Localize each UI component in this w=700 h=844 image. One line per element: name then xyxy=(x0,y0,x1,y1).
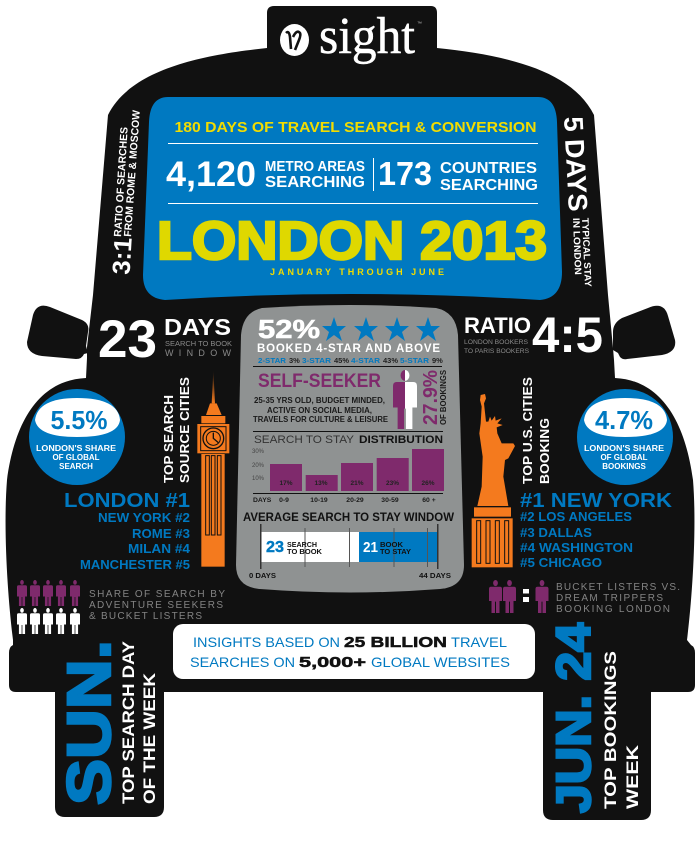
right wheel stat: june 24: JUN. 24 xyxy=(548,623,601,813)
callout: insights xyxy=(173,624,535,679)
badge: global search share: OF GLOBAL xyxy=(52,453,100,462)
timeline: average search to stay window: TO BOOK xyxy=(287,547,323,556)
timeline: average search to stay window: BOOK xyxy=(380,540,404,549)
icon: statue of liberty xyxy=(472,394,515,567)
right pillar stat: 5 DAYS xyxy=(558,116,593,212)
icon group: bucket listers vs dream trippers xyxy=(489,580,548,613)
left wheel stat: sunday: OF THE WEEK xyxy=(140,672,159,804)
heading: top search source cities: TOP SEARCH xyxy=(162,395,176,483)
23 days stat: SEARCH TO BOOK xyxy=(165,339,232,348)
right wheel stat: june 24 xyxy=(548,623,642,813)
badge: global bookings share: 4.7% xyxy=(595,405,653,435)
left mirror xyxy=(27,306,88,359)
list: top us booking cities: #4 WASHINGTON xyxy=(520,541,633,555)
logo: ™ xyxy=(417,21,422,27)
callout: insights: TRAVEL xyxy=(451,634,507,650)
bar chart: search to stay distribution: 20% xyxy=(252,463,265,469)
list: top us booking cities: #3 DALLAS xyxy=(520,526,592,540)
heading: top search source cities xyxy=(162,377,192,483)
bar chart: search to stay distribution: 21% xyxy=(350,480,364,487)
right wheel stat: june 24: TOP BOOKINGS xyxy=(601,651,620,809)
badge: global search share: SEARCH xyxy=(59,462,93,471)
self-seeker profile: TRAVELS FOR CULTURE & LEISURE xyxy=(253,415,388,424)
badge: global search share xyxy=(29,389,125,485)
timeline: average search to stay window: 23 xyxy=(266,539,284,556)
23 days stat xyxy=(98,310,232,369)
badge: global search share: 5.5% xyxy=(50,405,108,435)
heading: top us cities booking: TOP U.S. CITIES xyxy=(521,377,535,484)
caption: bucket listers vs dream trippers: DREAM TRIPPERS xyxy=(556,593,663,604)
callout: insights: 25 BILLION xyxy=(344,634,447,651)
left pillar stat xyxy=(108,110,143,275)
caption: bucket listers vs dream trippers xyxy=(556,582,680,615)
list: top search cities: MANCHESTER #5 xyxy=(80,558,190,572)
callout: insights: 5,000+ xyxy=(299,654,366,671)
badge: global bookings share: LONDON'S SHARE xyxy=(584,444,665,453)
star rating stat xyxy=(257,314,443,365)
left wheel stat: sunday: SUN. xyxy=(55,640,123,805)
self-seeker profile xyxy=(253,369,448,429)
caption: share of search: & BUCKET LISTERS xyxy=(89,611,202,622)
metro areas stat: 4,120 xyxy=(166,155,256,194)
caption: share of search: SHARE OF SEARCH BY xyxy=(89,589,225,600)
23 days stat: 23 xyxy=(98,310,157,369)
left wheel stat: sunday: TOP SEARCH DAY xyxy=(119,640,138,804)
star rating stat: 9% xyxy=(432,356,443,365)
star rating stat: 5-STAR xyxy=(400,356,430,365)
caption: share of search: ADVENTURE SEEKERS xyxy=(89,600,223,611)
left pillar stat: 3:1 xyxy=(108,237,138,275)
bar chart: search to stay distribution: 30% xyxy=(252,449,265,455)
ratio stat xyxy=(464,307,603,363)
countries stat: SEARCHING xyxy=(440,177,538,194)
right mirror xyxy=(613,306,675,359)
self-seeker profile: 25-35 YRS OLD, BUDGET MINDED, xyxy=(254,396,385,405)
bar chart: search to stay distribution: 20-29 xyxy=(346,497,364,504)
list: top search cities: LONDON #1 xyxy=(64,490,190,512)
central grey panel xyxy=(236,305,464,592)
timeline: average search to stay window: SEARCH xyxy=(287,540,317,549)
bar chart: search to stay distribution: 30-59 xyxy=(381,497,399,504)
logo: sight xyxy=(319,8,416,65)
timeline: average search to stay window: 21 xyxy=(363,539,378,556)
bar chart: search to stay distribution: 26% xyxy=(421,480,435,487)
star rating stat: BOOKED 4-STAR AND ABOVE xyxy=(257,343,440,355)
ratio stat: TO PARIS BOOKERS xyxy=(464,348,529,355)
23 days stat: DAYS xyxy=(164,314,231,340)
callout: insights: INSIGHTS BASED ON xyxy=(193,634,340,650)
bar chart: search to stay distribution: 0-9 xyxy=(279,497,289,504)
caption: bucket listers vs dream trippers: BOOKING LONDON xyxy=(556,604,670,615)
left pillar stat: RATIO OF SEARCHES xyxy=(112,127,131,237)
ratio stat: RATIO xyxy=(464,313,531,338)
bar chart: search to stay distribution: SEARCH TO STAY xyxy=(254,434,355,446)
main title: LONDON 2013 xyxy=(157,211,547,271)
list: top us booking cities: #5 CHICAGO xyxy=(520,556,602,570)
bar chart: search to stay distribution: 60 + xyxy=(422,497,436,504)
caption: share of search xyxy=(89,589,225,622)
left wheel stat: sunday xyxy=(55,640,159,805)
list: top search cities: NEW YORK #2 xyxy=(98,511,190,525)
list: top search cities xyxy=(64,490,190,572)
windshield heading: 180 DAYS OF TRAVEL SEARCH & CONVERSION xyxy=(174,119,536,136)
star rating stat: 45% xyxy=(334,356,349,365)
timeline: average search to stay window: 44 DAYS xyxy=(419,573,451,580)
icon group: adventure seekers and bucket listers xyxy=(17,580,80,634)
star rating stat: 43% xyxy=(383,356,398,365)
badge: global search share: LONDON'S SHARE xyxy=(36,444,117,453)
list: top search cities: ROME #3 xyxy=(132,527,190,541)
bar chart: search to stay distribution: DAYS xyxy=(253,497,272,504)
metro areas stat xyxy=(166,155,365,194)
metro areas stat: METRO AREAS xyxy=(265,159,365,175)
ratio stat: 4:5 xyxy=(532,307,603,363)
star rating stat: 52% xyxy=(258,314,320,344)
countries stat: COUNTRIES xyxy=(440,160,537,177)
list: top search cities: MILAN #4 xyxy=(128,542,190,556)
callout: insights: SEARCHES ON xyxy=(190,654,295,670)
icon: big ben xyxy=(197,370,229,567)
heading: top us cities booking: BOOKING xyxy=(538,418,552,484)
bar chart: search to stay distribution: 23% xyxy=(386,480,399,487)
right pillar stat xyxy=(558,116,593,288)
list: top us booking cities xyxy=(520,490,673,570)
timeline: average search to stay window: 0 DAYS xyxy=(249,573,276,580)
star rating stat: 2-STAR xyxy=(258,356,287,365)
self-seeker profile: ACTIVE ON SOCIAL MEDIA, xyxy=(267,406,372,415)
left pillar stat: FROM ROME & MOSCOW xyxy=(122,110,143,237)
badge: global bookings share: OF GLOBAL xyxy=(600,453,648,462)
star rating stat: 4-STAR xyxy=(351,356,381,365)
self-seeker profile: 27.9% xyxy=(420,370,442,425)
date range: JANUARY THROUGH JUNE xyxy=(270,267,444,277)
bar chart: search to stay distribution: 17% xyxy=(279,480,293,487)
badge: global bookings share xyxy=(577,389,673,485)
countries stat xyxy=(378,155,538,194)
timeline: average search to stay window xyxy=(243,512,454,580)
heading: top search source cities: SOURCE CITIES xyxy=(178,377,192,483)
right wheel stat: june 24: WEEK xyxy=(623,744,642,809)
star rating stat: 3-STAR xyxy=(302,356,332,365)
badge: global bookings share: BOOKINGS xyxy=(602,462,646,471)
bar chart: search to stay distribution: DISTRIBUTION xyxy=(359,434,443,446)
timeline: average search to stay window: TO STAY xyxy=(380,547,411,556)
23 days stat: WINDOW xyxy=(165,348,232,358)
self-seeker profile: SELF-SEEKER xyxy=(258,371,381,392)
self-seeker profile: OF BOOKINGS xyxy=(439,369,448,425)
ratio stat: LONDON BOOKERS xyxy=(464,339,528,346)
list: top us booking cities: #2 LOS ANGELES xyxy=(520,510,632,524)
timeline: average search to stay window: AVERAGE SEARCH TO STAY WINDOW xyxy=(243,512,454,524)
countries stat: 173 xyxy=(378,155,432,192)
bar chart: search to stay distribution: 10% xyxy=(252,476,265,482)
callout: insights: GLOBAL WEBSITES xyxy=(371,654,510,670)
bar chart: search to stay distribution: 13% xyxy=(314,480,328,487)
star rating stat: 3% xyxy=(289,356,300,365)
bar chart: search to stay distribution: 10-19 xyxy=(310,497,328,504)
right pillar stat: IN LONDON xyxy=(570,218,583,275)
windshield panel xyxy=(143,97,562,300)
right pillar stat: TYPICAL STAY xyxy=(579,218,593,288)
metro areas stat: SEARCHING xyxy=(265,174,365,191)
icon: half purple person xyxy=(393,370,417,429)
bar chart: search to stay distribution xyxy=(252,434,444,504)
heading: top us cities booking xyxy=(521,377,552,484)
caption: bucket listers vs dream trippers: BUCKET LISTERS VS. xyxy=(556,582,680,593)
list: top us booking cities: #1 NEW YORK xyxy=(520,490,673,512)
